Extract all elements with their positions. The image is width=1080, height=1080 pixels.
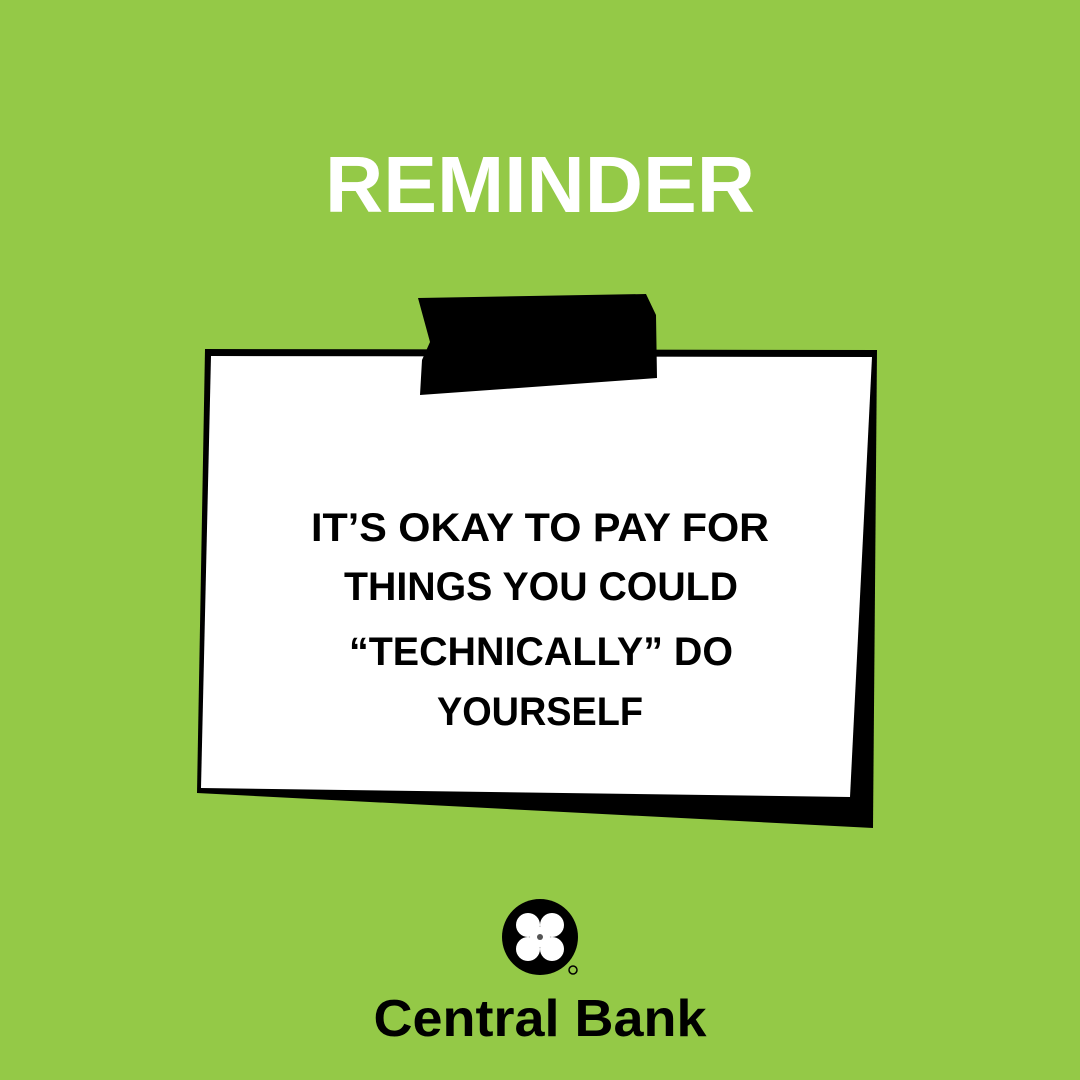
icon: clover (502, 899, 578, 975)
icon: tape (418, 294, 657, 395)
logo text: Central Bank (374, 990, 707, 1048)
text block: message: THINGS YOU COULD (344, 565, 738, 609)
panel: note card (197, 294, 877, 828)
text block: message: “TECHNICALLY” DO (349, 630, 733, 674)
text block: message (311, 506, 769, 734)
text block: message: YOURSELF (437, 690, 643, 734)
text block: message: IT’S OKAY TO PAY FOR (311, 506, 769, 550)
logo: Central Bank (374, 899, 707, 1048)
title: REMINDER (325, 140, 755, 229)
